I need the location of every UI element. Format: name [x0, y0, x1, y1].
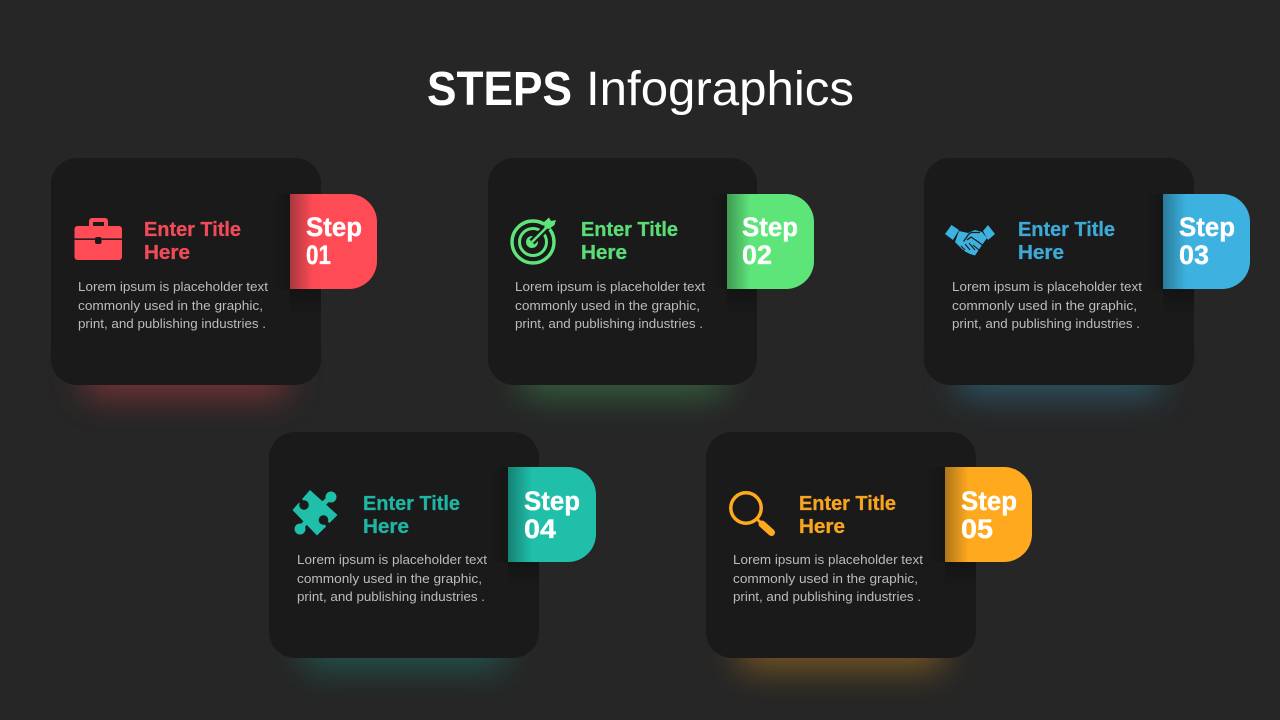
text block	[515, 280, 706, 331]
text block: print, and publishing industries .	[515, 317, 703, 331]
glow: step 01	[99, 358, 273, 382]
panel: step 05	[706, 432, 1032, 658]
heading	[363, 493, 460, 538]
icon: puzzle piece	[292, 490, 338, 536]
heading: Enter Title	[363, 493, 460, 515]
text block: Lorem ipsum is placeholder text	[952, 280, 1143, 294]
text block: Lorem ipsum is placeholder text	[78, 280, 269, 294]
text block: commonly used in the graphic,	[515, 299, 700, 313]
step label	[524, 486, 580, 544]
text block: commonly used in the graphic,	[733, 572, 918, 586]
text block: Lorem ipsum is placeholder text	[515, 280, 706, 294]
step label: 04	[524, 514, 556, 544]
heading: Here	[581, 242, 627, 264]
step tab	[290, 194, 377, 289]
title	[427, 63, 854, 116]
panel: step 01	[51, 158, 377, 385]
step label: Step	[1179, 212, 1235, 242]
text block	[952, 280, 1143, 331]
heading: Here	[363, 516, 409, 538]
step label: 03	[1179, 240, 1209, 270]
step tab	[727, 194, 814, 289]
heading	[581, 219, 678, 264]
heading: Here	[799, 516, 845, 538]
text block: commonly used in the graphic,	[297, 572, 482, 586]
glow: step 03	[972, 358, 1146, 382]
text block	[78, 280, 269, 331]
heading: Enter Title	[799, 493, 896, 515]
step label	[1179, 212, 1235, 270]
text block: Lorem ipsum is placeholder text	[733, 553, 924, 567]
icon: briefcase	[74, 218, 122, 260]
heading: Here	[144, 242, 190, 264]
glow: step 05	[754, 631, 928, 655]
heading: Here	[1018, 242, 1064, 264]
step label	[306, 212, 362, 270]
title: STEPS	[427, 63, 572, 116]
glow: step 04	[317, 631, 491, 655]
step label: Step	[742, 212, 798, 242]
icon: magnifying glass	[731, 493, 772, 532]
heading: Enter Title	[581, 219, 678, 241]
step tab	[1163, 194, 1250, 289]
text block	[733, 553, 924, 604]
panel: step 02	[488, 158, 814, 385]
step tab	[508, 467, 596, 562]
title: Infographics	[586, 63, 854, 116]
heading: Enter Title	[144, 219, 241, 241]
heading	[144, 219, 241, 264]
text block: Lorem ipsum is placeholder text	[297, 553, 488, 567]
heading	[1018, 219, 1115, 264]
step tab	[945, 467, 1032, 562]
step label: 02	[742, 240, 772, 270]
step label: Step	[524, 486, 580, 516]
heading: Enter Title	[1018, 219, 1115, 241]
text block: print, and publishing industries .	[78, 317, 266, 331]
text block: commonly used in the graphic,	[952, 299, 1137, 313]
heading	[799, 493, 896, 538]
text block: commonly used in the graphic,	[78, 299, 263, 313]
step label: Step	[306, 212, 362, 242]
step label: Step	[961, 486, 1017, 516]
icon: target	[512, 218, 556, 263]
panel: step 04	[269, 432, 596, 658]
text block: print, and publishing industries .	[952, 317, 1140, 331]
step label	[961, 486, 1017, 544]
glow: step 02	[536, 358, 710, 382]
panel: step 03	[924, 158, 1250, 385]
text block: print, and publishing industries .	[297, 590, 485, 604]
text block	[297, 553, 488, 604]
text block: print, and publishing industries .	[733, 590, 921, 604]
step label	[742, 212, 798, 270]
icon: handshake	[945, 225, 995, 256]
step label: 01	[306, 240, 331, 270]
step label: 05	[961, 514, 993, 544]
